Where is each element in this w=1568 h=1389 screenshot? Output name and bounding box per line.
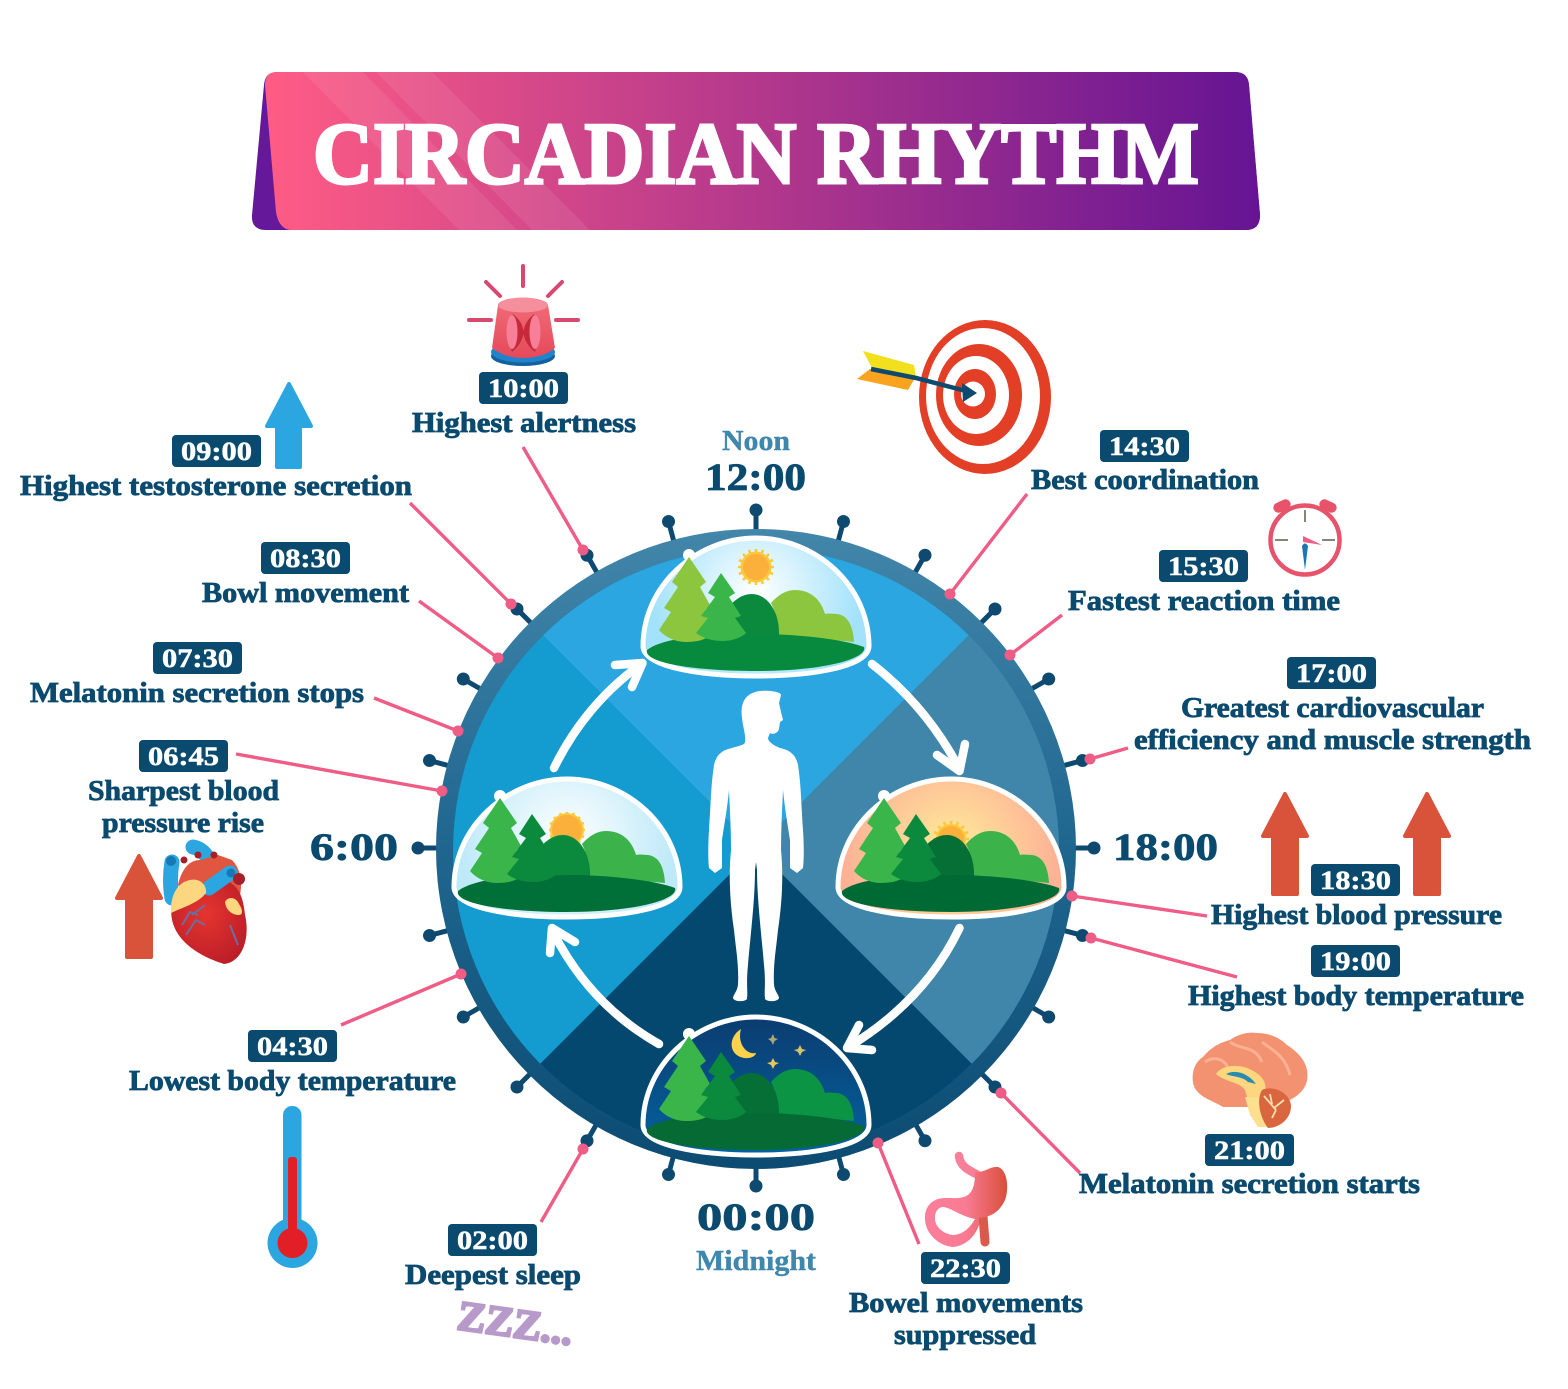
event: 22:30 bowel suppressed — [849, 1138, 1083, 1351]
event: 17:00 cardiovascular: 17:00 — [1296, 659, 1367, 688]
clock labels — [310, 426, 1218, 1277]
event: 06:45 blood pressure rise — [88, 740, 448, 839]
event: 06:45 blood pressure rise: 06:45 — [148, 742, 219, 771]
event: 08:30 bowl movement: 08:30 — [270, 544, 341, 573]
event: 15:30 reaction time: Fastest reaction time — [1068, 586, 1340, 617]
event: 22:30 bowel suppressed: suppressed — [894, 1320, 1036, 1351]
noon: Noon — [722, 426, 790, 457]
event: 19:00 highest temperature: 19:00 — [1320, 947, 1391, 976]
icon: red up arrow two — [1405, 794, 1449, 894]
event: 07:30 melatonin stops: 07:30 — [162, 644, 233, 673]
event: 02:00 deepest sleep: Deepest sleep — [405, 1260, 581, 1291]
icon: sleep letters: ZZZ... — [455, 1293, 576, 1355]
event: 10:00 highest alertness: 10:00 — [488, 374, 559, 403]
event: 18:30 highest pressure: 18:30 — [1320, 866, 1391, 895]
scene: morning dome — [454, 779, 680, 917]
event: 02:00 deepest sleep: 02:00 — [457, 1226, 528, 1255]
outer ring — [436, 529, 1076, 1169]
event: 09:00 testosterone — [20, 435, 516, 610]
six pm: 18:00 — [1113, 826, 1218, 869]
title banner — [252, 72, 1260, 230]
title text: CIRCADIAN RHYTHM — [313, 106, 1199, 203]
event: 21:00 melatonin starts: Melatonin secretion starts — [1079, 1169, 1420, 1200]
icon: heart — [166, 847, 247, 964]
event: 21:00 melatonin starts — [996, 1088, 1420, 1200]
hour ticks — [412, 504, 1100, 1192]
event: 10:00 highest alertness — [412, 372, 636, 556]
event: 07:30 melatonin stops — [30, 642, 464, 736]
event: 02:00 deepest sleep — [405, 1144, 588, 1291]
event: 17:00 cardiovascular: efficiency and muscle strength — [1134, 725, 1531, 756]
icon: brain — [1193, 1033, 1307, 1128]
event: 17:00 cardiovascular — [1084, 657, 1531, 764]
event: 07:30 melatonin stops: Melatonin secretion stops — [30, 678, 364, 709]
midnight: 00:00 — [697, 1196, 815, 1239]
icon: alarm clock — [1270, 498, 1340, 574]
midnight: Midnight — [696, 1246, 817, 1277]
noon — [705, 426, 806, 499]
scene: evening dome — [838, 779, 1064, 917]
icon: red up arrow left — [117, 856, 161, 957]
event: 09:00 testosterone: Highest testosterone secretion — [20, 471, 412, 502]
event: 15:30 reaction time: 15:30 — [1168, 552, 1239, 581]
event: 04:30 lowest temperature: 04:30 — [257, 1032, 328, 1061]
event: 14:30 coordination — [944, 430, 1259, 600]
event: 22:30 bowel suppressed: 22:30 — [930, 1254, 1001, 1283]
scene: night dome — [643, 1017, 869, 1155]
event: 06:45 blood pressure rise: Sharpest blood — [88, 776, 279, 807]
cycle arrows — [550, 663, 965, 1050]
event: 19:00 highest temperature: Highest body temperature — [1188, 981, 1524, 1012]
day and night quadrants — [453, 555, 1059, 1132]
event: 14:30 coordination: 14:30 — [1109, 432, 1180, 461]
event: 04:30 lowest temperature: Lowest body temperature — [129, 1066, 456, 1097]
clock dial — [400, 492, 1112, 1204]
event: 15:30 reaction time — [1004, 550, 1340, 660]
icon: alarm beacon — [469, 266, 578, 366]
noon: 12:00 — [705, 456, 806, 499]
icon: thermometer — [268, 1106, 318, 1268]
event: 18:30 highest pressure — [1066, 864, 1502, 931]
event: 10:00 highest alertness: Highest alertness — [412, 408, 636, 439]
scene: noon dome — [643, 538, 869, 676]
icon: blue up arrow — [267, 384, 311, 467]
event: 18:30 highest pressure: Highest blood pressure — [1211, 900, 1502, 931]
event: 06:45 blood pressure rise: pressure rise — [102, 808, 264, 839]
event: 17:00 cardiovascular: Greatest cardiovascular — [1181, 693, 1484, 724]
event: 21:00 melatonin starts: 21:00 — [1214, 1136, 1285, 1165]
icon: red up arrow one — [1263, 794, 1307, 894]
six am: 6:00 — [310, 826, 398, 869]
event: 08:30 bowl movement — [202, 542, 504, 664]
event: 22:30 bowel suppressed: Bowel movements — [849, 1288, 1083, 1319]
human silhouette — [708, 691, 804, 1001]
event: 09:00 testosterone: 09:00 — [181, 437, 252, 466]
event: 14:30 coordination: Best coordination — [1031, 465, 1259, 496]
midnight — [696, 1196, 817, 1277]
icon: target with arrow — [857, 320, 1051, 474]
event: 19:00 highest temperature — [1086, 932, 1524, 1012]
event: 08:30 bowl movement: Bowl movement — [202, 578, 410, 609]
icon: stomach — [925, 1156, 1007, 1247]
event: 04:30 lowest temperature — [129, 968, 466, 1097]
